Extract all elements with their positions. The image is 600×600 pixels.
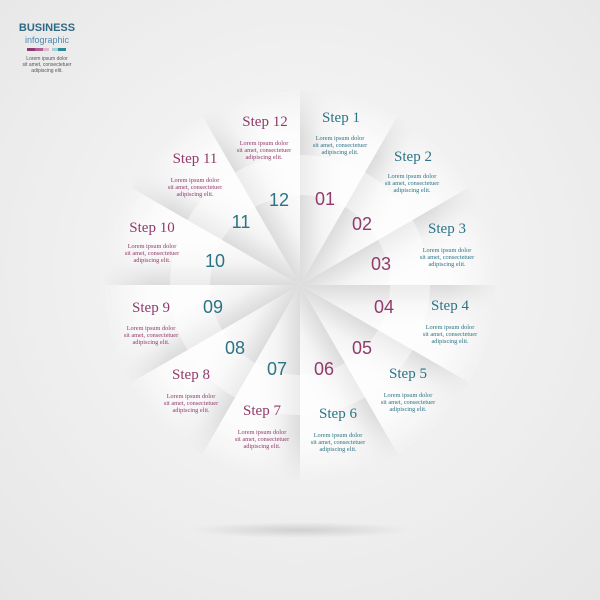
step descriptions: adipiscing elit.	[132, 339, 170, 346]
numbers: 10	[205, 251, 225, 271]
step descriptions: sit amet, consectetuer	[235, 436, 290, 443]
step descriptions: Lorem ipsum dolor	[314, 432, 363, 439]
step labels: Step 9	[132, 300, 170, 316]
step labels	[129, 110, 469, 422]
step descriptions: Lorem ipsum dolor	[423, 247, 472, 254]
header	[19, 22, 75, 74]
header: Lorem ipsum dolor	[26, 56, 68, 62]
step descriptions: sit amet, consectetuer	[311, 439, 366, 446]
step labels: Step 2	[394, 149, 432, 165]
step labels: Step 8	[172, 367, 210, 383]
step descriptions: sit amet, consectetuer	[125, 250, 180, 257]
step descriptions: Lorem ipsum dolor	[316, 135, 365, 142]
step descriptions	[124, 135, 478, 453]
step labels: Step 4	[431, 298, 469, 314]
header: adipiscing elit.	[31, 68, 63, 74]
step descriptions: adipiscing elit.	[133, 257, 171, 264]
step descriptions: adipiscing elit.	[428, 261, 466, 268]
header: sit amet, consectetuer	[23, 62, 72, 68]
numbers: 05	[352, 338, 372, 358]
step descriptions: sit amet, consectetuer	[423, 331, 478, 338]
step descriptions: adipiscing elit.	[389, 406, 427, 413]
step descriptions: adipiscing elit.	[245, 154, 283, 161]
step descriptions: sit amet, consectetuer	[420, 254, 475, 261]
numbers: 07	[267, 359, 287, 379]
step descriptions: sit amet, consectetuer	[313, 142, 368, 149]
step labels: Step 6	[319, 406, 357, 422]
step descriptions: adipiscing elit.	[319, 446, 357, 453]
numbers: 02	[352, 214, 372, 234]
step descriptions: Lorem ipsum dolor	[240, 140, 289, 147]
step descriptions: Lorem ipsum dolor	[384, 392, 433, 399]
step descriptions: Lorem ipsum dolor	[127, 325, 176, 332]
step descriptions: Lorem ipsum dolor	[388, 173, 437, 180]
step descriptions: Lorem ipsum dolor	[426, 324, 475, 331]
numbers: 08	[225, 338, 245, 358]
step descriptions: adipiscing elit.	[321, 149, 359, 156]
step labels: Step 12	[242, 114, 288, 130]
step labels: Step 5	[389, 366, 427, 382]
header: BUSINESS	[19, 22, 75, 34]
step descriptions: adipiscing elit.	[393, 187, 431, 194]
step descriptions: Lorem ipsum dolor	[128, 243, 177, 250]
step labels: Step 7	[243, 403, 281, 419]
numbers: 09	[203, 297, 223, 317]
step descriptions: Lorem ipsum dolor	[167, 393, 216, 400]
step descriptions: adipiscing elit.	[172, 407, 210, 414]
step descriptions: adipiscing elit.	[176, 191, 214, 198]
numbers	[203, 189, 394, 379]
step descriptions: adipiscing elit.	[243, 443, 281, 450]
step descriptions: sit amet, consectetuer	[124, 332, 179, 339]
step labels: Step 11	[173, 151, 217, 167]
numbers: 04	[374, 297, 394, 317]
step labels: Step 10	[129, 220, 175, 236]
numbers: 11	[232, 212, 250, 232]
floor shadow	[190, 522, 410, 538]
pinwheel wedges	[120, 104, 480, 464]
numbers: 03	[371, 254, 391, 274]
step descriptions: sit amet, consectetuer	[168, 184, 223, 191]
step descriptions: sit amet, consectetuer	[385, 180, 440, 187]
step descriptions: sit amet, consectetuer	[381, 399, 436, 406]
step labels: Step 1	[322, 110, 360, 126]
numbers: 06	[314, 359, 334, 379]
header: infographic	[25, 35, 70, 45]
numbers: 12	[269, 190, 289, 210]
step descriptions: Lorem ipsum dolor	[171, 177, 220, 184]
numbers: 01	[315, 189, 335, 209]
step descriptions: sit amet, consectetuer	[237, 147, 292, 154]
step descriptions: adipiscing elit.	[431, 338, 469, 345]
step labels: Step 3	[428, 221, 466, 237]
step descriptions: sit amet, consectetuer	[164, 400, 219, 407]
step descriptions: Lorem ipsum dolor	[238, 429, 287, 436]
